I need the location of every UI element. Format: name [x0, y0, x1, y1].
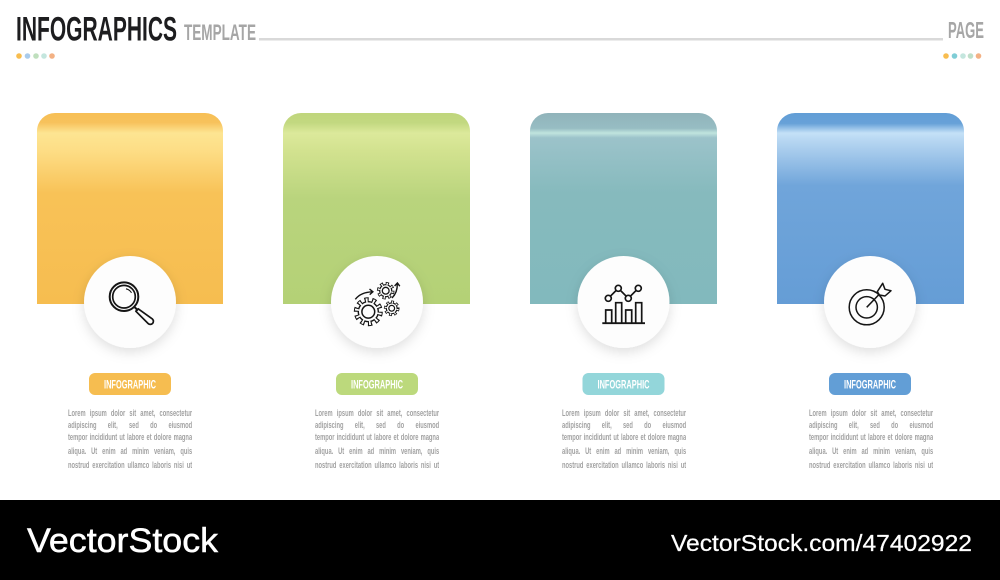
text block: green column: adipiscing elit, sed do eiusmod [315, 420, 439, 430]
header rule [259, 38, 943, 40]
text block: green column: tempor incididunt ut labore et dolore magna [315, 432, 439, 442]
footer logo: VectorStock [27, 522, 219, 560]
text block: teal column [562, 408, 686, 470]
left dots [16, 53, 55, 59]
text block: teal column: aliqua. Ut enim ad minim veniam, quis [562, 446, 686, 456]
icon badge: chart [578, 256, 670, 348]
text block: green column: aliqua. Ut enim ad minim veniam, quis [315, 446, 439, 456]
right dots [943, 53, 981, 59]
text block: teal column: Lorem ipsum dolor sit amet, consectetur [562, 408, 686, 418]
text block: teal column: adipiscing elit, sed do eiusmod [562, 420, 686, 430]
footer url: VectorStock.com/47402922 [671, 530, 972, 556]
text block: yellow column: aliqua. Ut enim ad minim veniam, quis [68, 446, 192, 456]
label pill: blue: INFOGRAPHIC [844, 380, 896, 392]
label pill: teal: INFOGRAPHIC [598, 380, 650, 392]
text block: green column [315, 408, 439, 470]
footer bar [0, 500, 1000, 580]
label pill: yellow [89, 373, 171, 395]
text block: teal column: tempor incididunt ut labore et dolore magna [562, 432, 686, 442]
icon badge: target [824, 256, 916, 348]
panel: blue card [777, 113, 964, 304]
label pill: yellow: INFOGRAPHIC [104, 380, 156, 392]
text block: blue column: Lorem ipsum dolor sit amet, consectetur [809, 408, 933, 418]
subtitle: TEMPLATE [184, 20, 256, 45]
text block: blue column [809, 408, 933, 470]
title: INFOGRAPHICS [16, 10, 177, 48]
text block: blue column: adipiscing elit, sed do eiusmod [809, 420, 933, 430]
text block: yellow column [68, 408, 192, 470]
text block: blue column: nostrud exercitation ullamco laboris nisi ut [809, 460, 933, 470]
text block: yellow column: Lorem ipsum dolor sit amet, consectetur [68, 408, 192, 418]
text block: green column: nostrud exercitation ullamco laboris nisi ut [315, 460, 439, 470]
label pill: blue [829, 373, 911, 395]
panel: yellow card [37, 113, 223, 304]
panel: green card [283, 113, 470, 304]
label pill: teal [582, 373, 664, 395]
text block: teal column: nostrud exercitation ullamco laboris nisi ut [562, 460, 686, 470]
text block: yellow column: nostrud exercitation ullamco laboris nisi ut [68, 460, 192, 470]
label pill: green: INFOGRAPHIC [351, 380, 403, 392]
panel: teal card [530, 113, 717, 304]
icon badge: gears [331, 256, 423, 348]
text block: yellow column: adipiscing elit, sed do eiusmod [68, 420, 192, 430]
text block: blue column: aliqua. Ut enim ad minim veniam, quis [809, 446, 933, 456]
icon badge: magnifier [84, 256, 176, 348]
text block: green column: Lorem ipsum dolor sit amet, consectetur [315, 408, 439, 418]
text block: blue column: tempor incididunt ut labore et dolore magna [809, 432, 933, 442]
text block: yellow column: tempor incididunt ut labore et dolore magna [68, 432, 192, 442]
header [16, 10, 984, 59]
label pill: green [336, 373, 418, 395]
